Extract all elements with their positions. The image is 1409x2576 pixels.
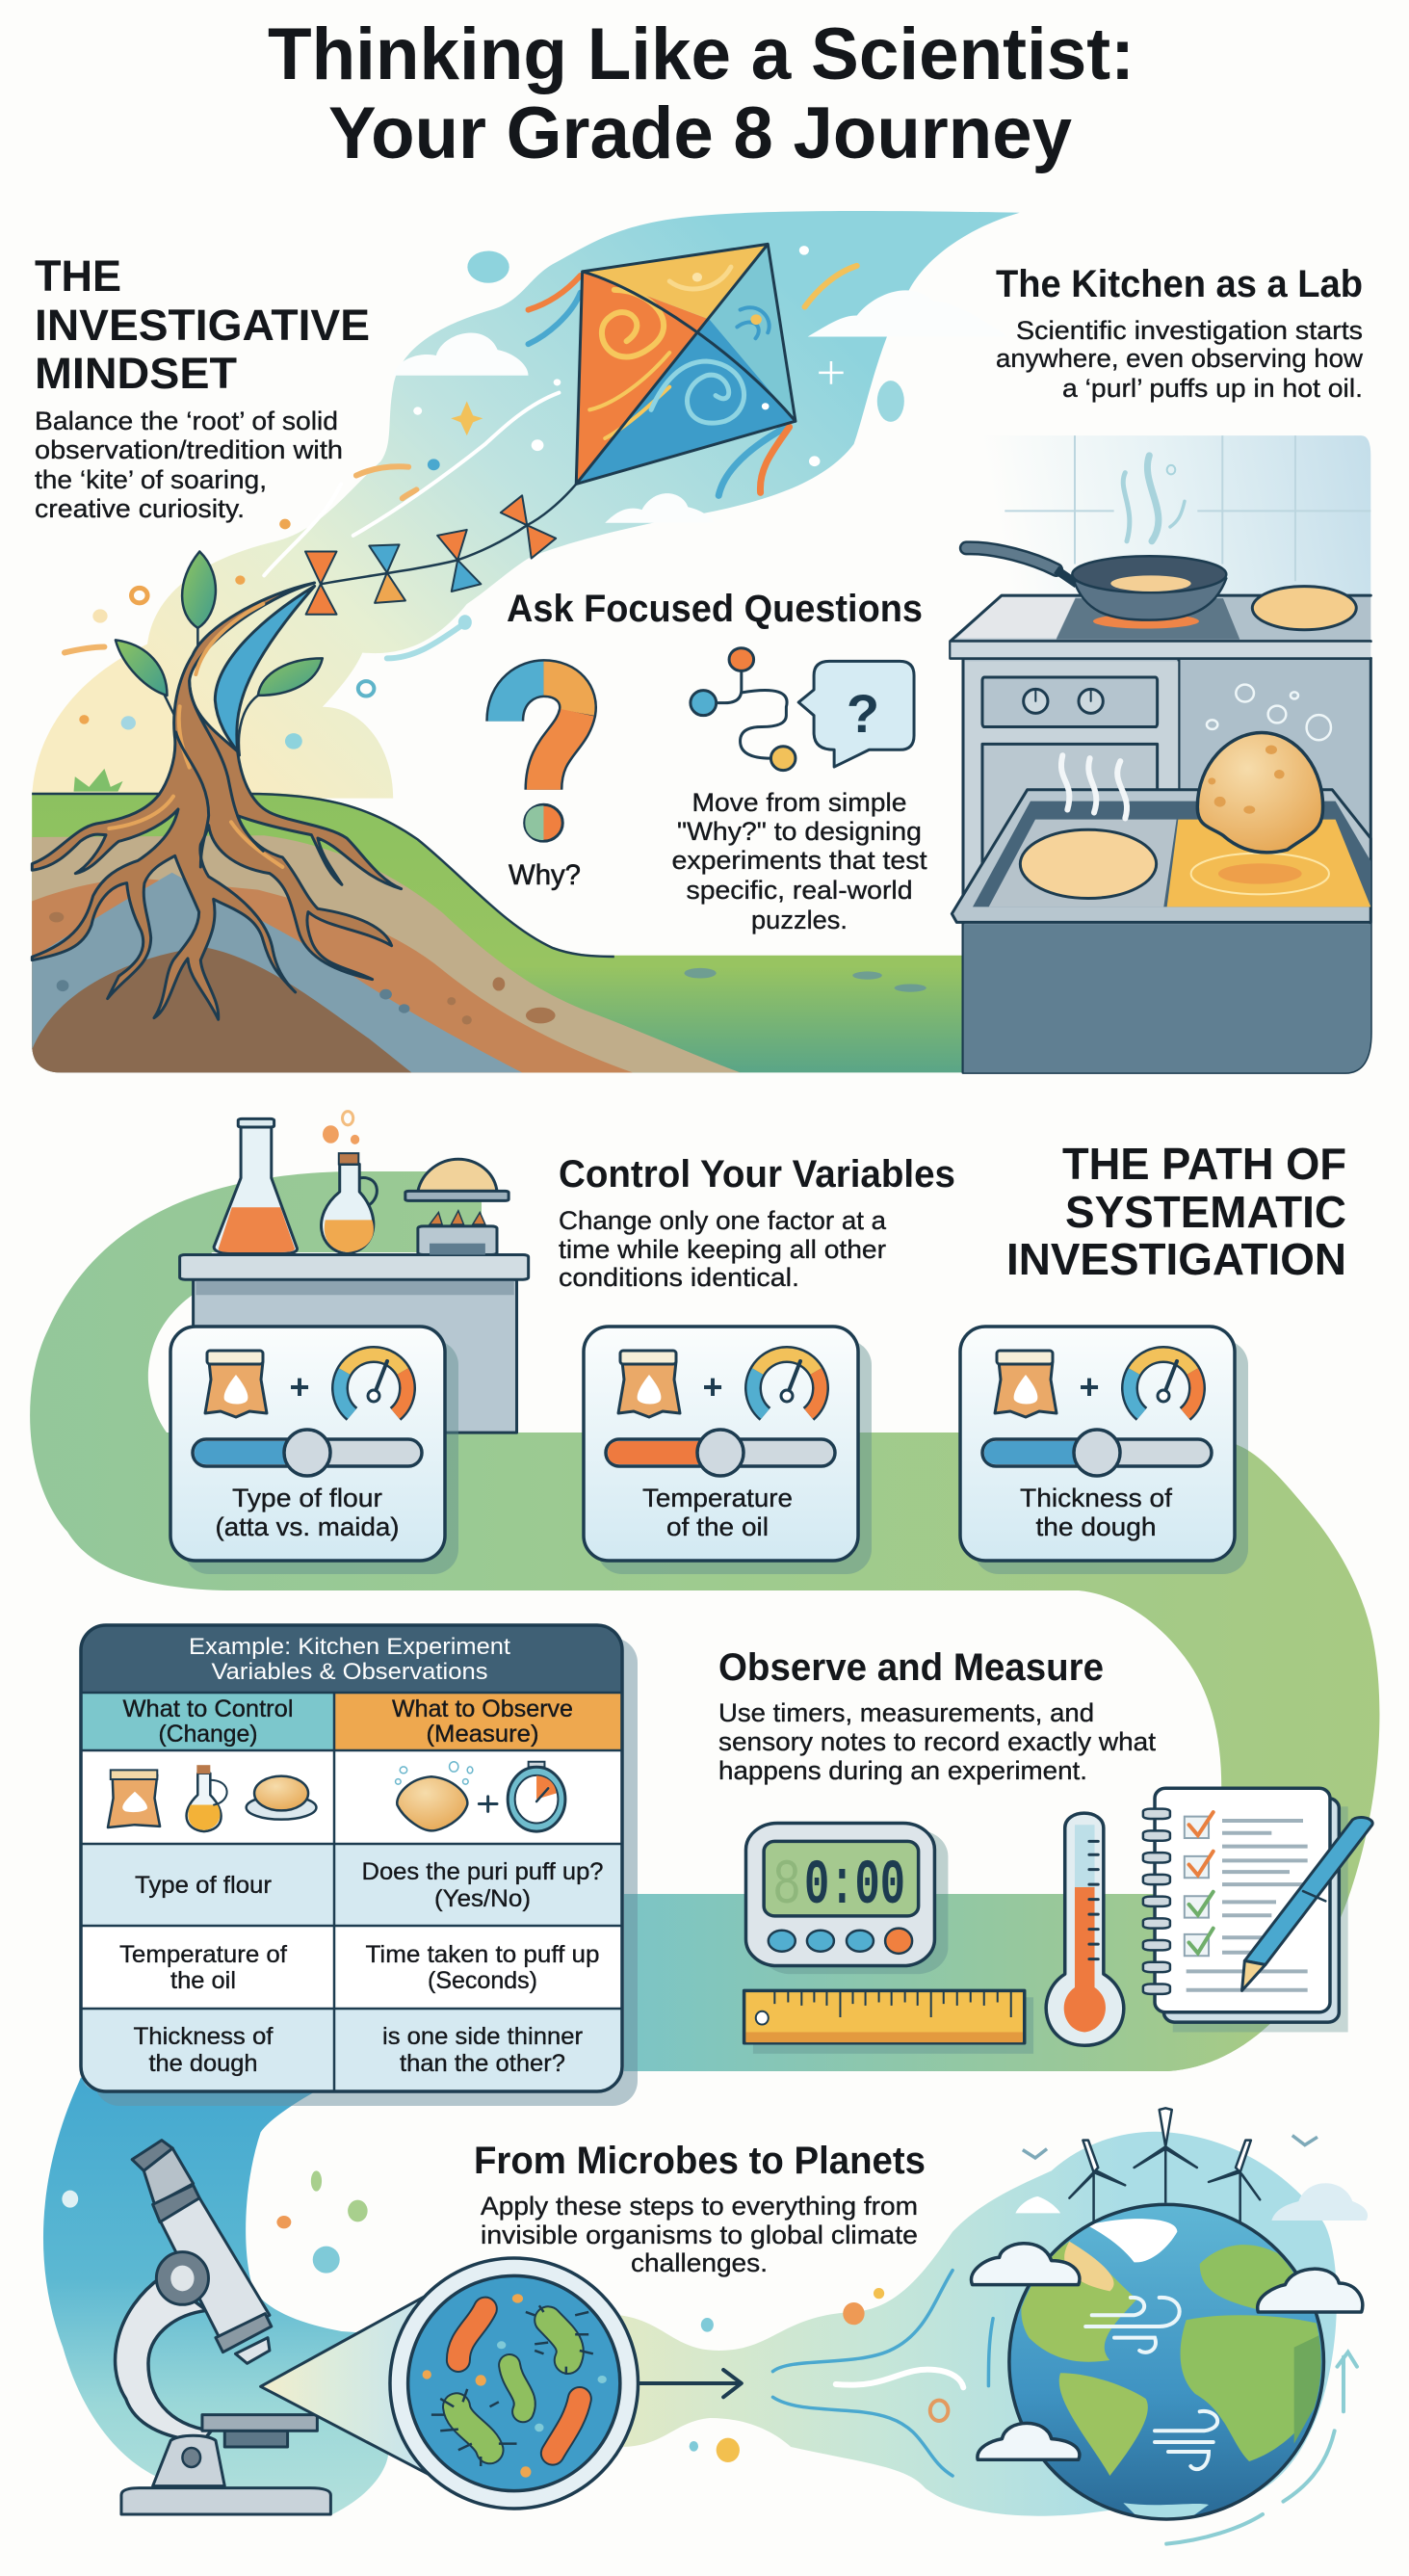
wall tiles [951,435,1370,649]
heading: control your variables: Control Your Variables [559,1153,955,1196]
heading: path of systematic investigation: SYSTEMATIC [1065,1187,1346,1237]
trunk highlights [109,604,282,867]
text: mindset description [35,407,343,523]
panel: microbes to planets illustration [62,2108,1368,2544]
table shadow [94,1638,638,2106]
text: microbes description: Apply these steps to everything from [481,2192,918,2221]
flask [214,1118,297,1253]
label: Thickness of [1020,1484,1173,1512]
table rows [81,1693,622,2091]
title: Your Grade 8 Journey [328,92,1072,174]
plus: + [702,1367,723,1406]
icon: thermometer [1046,1813,1124,2045]
table cell text: (Yes/No) [434,1885,531,1912]
green path band [30,1171,1379,2071]
tree with roots [32,583,402,1019]
circulating arrows [1166,2353,1357,2544]
table cell text: the oil [170,1967,236,1994]
oven steam [1061,755,1127,818]
card: temperature of the oil [584,1327,872,1574]
sky wash [32,211,1020,799]
panel: investigative mindset scene [32,211,1020,1072]
heading: investigative mindset: INVESTIGATIVE [35,301,370,350]
table: kitchen experiment [81,1625,638,2106]
heading: kitchen as a lab: The Kitchen as a Lab [996,263,1363,305]
oil jar [322,1153,377,1253]
bubbles above flask [323,1112,359,1144]
trunk strand lines [176,681,263,867]
text: microbes description: invisible organisms to global climate [481,2221,918,2249]
icon: flour bag [618,1351,680,1417]
heading: path of systematic investigation: THE PATH OF [1062,1139,1346,1189]
cabinet [963,658,1370,1072]
label: (atta vs. maida) [216,1512,399,1541]
column header: what to control: (Change) [158,1721,258,1748]
leaves [116,551,323,755]
table cell text: (Seconds) [428,1967,537,1994]
card: thickness of the dough [960,1327,1248,1574]
heading: ask focused questions: Ask Focused Questions [507,588,923,630]
text: mindset description: Balance the ‘root’ of solid [35,407,338,435]
card: type of flour [170,1327,458,1574]
table cell text [119,1858,603,2077]
icon: flow and speech bubble [691,648,914,771]
plus [479,1797,497,1811]
heading: investigative mindset: MINDSET [35,349,237,398]
lower blue band [43,2078,389,2514]
column header: what to control [81,1693,334,1750]
text: control description: Change only one factor at a [559,1206,887,1235]
kite [529,244,796,495]
slider [982,1430,1212,1476]
label: Temperature [642,1484,793,1512]
text: questions description [672,788,927,934]
heading: investigative mindset [35,251,370,398]
label [216,1484,399,1541]
kite string and bows [305,484,576,615]
magnified microbes lens [390,2258,639,2509]
table title bar: Variables & Observations [212,1659,487,1685]
heading: investigative mindset: THE [35,251,121,301]
text: questions description: "Why?" to designing [677,817,922,846]
trunk and roots [32,583,402,1019]
ground layers [32,793,966,1072]
microscope [116,2141,330,2514]
table cell text: Type of flour [135,1872,272,1899]
clouds [393,290,1007,523]
text: microbes description [481,2192,918,2277]
text: control description [559,1206,887,1292]
label: of the oil [666,1512,769,1541]
frying tray [952,790,1370,922]
bench cabinet [194,1279,517,1433]
icon: gauge [340,1354,407,1414]
heading: path of systematic investigation: INVESTIGATION [1006,1234,1346,1284]
panel: kitchen scene [951,435,1370,1072]
blue swoosh [215,586,315,751]
table cell text: is one side thinner [382,2023,583,2050]
flat puri [1020,829,1157,898]
text: mindset description: observation/tredition with [35,435,343,464]
icon: ruler [744,1990,1033,2054]
clouds around globe [971,2183,1368,2459]
decorative particles [62,2170,993,2476]
table cell text: than the other? [400,2050,565,2077]
text: questions description: experiments that test [672,846,927,875]
birds [1023,2136,1318,2158]
title [268,13,1135,174]
plus: + [1079,1367,1100,1406]
table title bar: Example: Kitchen Experiment [189,1634,510,1660]
label: why: Why? [509,859,581,891]
icon: gauge [753,1354,821,1414]
plus: + [289,1367,310,1406]
steam [1123,456,1185,541]
text: questions description: puzzles. [751,906,848,934]
teal lower band [624,1894,1348,2071]
lab bench with glassware [180,1112,529,1433]
bench top [180,1254,529,1279]
puffed puri [1197,732,1323,853]
slider [606,1430,835,1476]
text: observe description: sensory notes to record exactly what [718,1727,1157,1756]
icon: puffed puri [396,1762,473,1830]
bubbles [1207,685,1331,740]
grass tuft [74,769,123,792]
text: observe description: Use timers, measurements, and [718,1698,1094,1727]
text: questions description: specific, real-world [686,876,913,905]
text: kitchen description [996,316,1364,403]
icon: flour bag [205,1351,267,1417]
column header: what to observe [334,1693,622,1750]
globe [1009,2204,1333,2521]
timer digits [772,1850,905,1922]
timer digits: 0:00 [804,1850,905,1922]
wind turbines [1069,2108,1260,2222]
text: questions description: Move from simple [691,788,907,817]
column header: what to observe: (Measure) [426,1721,539,1748]
text: kitchen description: Scientific investigation starts [1016,316,1363,345]
column header: what to control: What to Control [123,1695,293,1722]
text: observe description: happens during an experiment. [718,1756,1087,1785]
heading: path of systematic investigation [1006,1139,1346,1284]
measuring tools [744,1788,1372,2054]
icon: flour bag [108,1770,160,1827]
table cell text: the dough [148,2050,258,2077]
icon: digital timer [745,1823,948,1974]
table cell text: Temperature of [119,1941,287,1968]
label [642,1484,793,1541]
icon: puri on plate [247,1776,316,1820]
counter and hob [951,595,1370,658]
table grid and frame [81,1625,622,2091]
icon: stopwatch [508,1762,565,1831]
title: Thinking Like a Scientist: [268,13,1135,95]
flowing wash [620,2132,1337,2516]
table title bar [81,1625,622,1693]
column header: what to observe: What to Observe [392,1695,573,1722]
timer digits: 8 [772,1850,801,1922]
text: observe description [718,1698,1157,1785]
puri on counter [1252,587,1356,630]
icon: oil bottle [187,1765,227,1831]
text: control description: time while keeping all other [559,1235,886,1264]
frying pan [966,548,1226,620]
text: microbes description: challenges. [631,2248,768,2277]
table cell text: Thickness of [133,2023,274,2050]
decorative dots [65,246,857,749]
text: mindset description: creative curiosity. [35,494,245,523]
dough on burner [405,1159,509,1254]
text: kitchen description: a ‘purl’ puffs up in hot oil. [1062,374,1363,403]
icon: notebook with checklist [1143,1788,1348,2032]
label: Type of flour [232,1484,382,1512]
text: mindset description: the ‘kite’ of soaring, [35,465,267,494]
text: control description: conditions identical. [559,1263,799,1292]
heading: from microbes to planets: From Microbes to Planets [474,2140,926,2182]
table cell text: Time taken to puff up [366,1941,599,1968]
table icons [108,1762,565,1831]
label [1020,1484,1173,1541]
speech bubble question mark: ? [847,683,879,744]
arrow [639,2370,742,2397]
text: kitchen description: anywhere, even observing how [996,344,1364,373]
icon: gauge [1130,1354,1197,1414]
icon: flour bag [995,1351,1057,1417]
label: the dough [1036,1512,1156,1541]
magnifier cone [261,2293,431,2476]
icon: pen [1242,1818,1372,1990]
heading: observe and measure: Observe and Measure [718,1646,1104,1689]
table cell text: Does the puri puff up? [362,1858,603,1885]
icon: question mark [505,678,578,841]
slider [193,1430,422,1476]
